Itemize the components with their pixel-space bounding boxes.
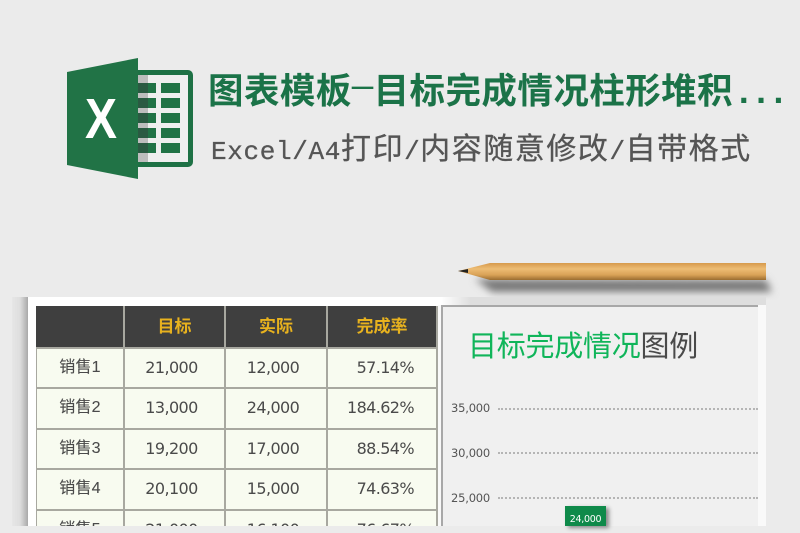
panel: chart	[441, 305, 758, 526]
axis label 30,000: 30,000	[451, 446, 490, 460]
bar: 24,000	[565, 506, 606, 526]
axis label 35,000: 35,000	[451, 401, 490, 415]
panel: data table: 实际	[259, 317, 293, 336]
panel: data table	[36, 306, 438, 526]
icon: Excel logo: X	[85, 87, 117, 151]
panel: data table: 15,000	[247, 479, 299, 498]
panel: data table: 19,200	[145, 439, 198, 458]
gridline 30,000	[498, 452, 758, 454]
row 4: 销售4	[59, 480, 101, 497]
panel: data table: 完成率	[356, 317, 408, 336]
panel: data table: 88.54%	[357, 439, 414, 458]
row 2	[37, 389, 123, 428]
panel: paper	[28, 297, 766, 526]
row 2: 销售2	[59, 399, 101, 416]
gridline 35,000	[498, 408, 758, 410]
row 1: 销售1	[59, 359, 101, 376]
row 1	[37, 349, 123, 387]
panel: data table: 21,000	[145, 358, 198, 377]
panel: data table: 74.63%	[357, 479, 414, 498]
table header	[36, 306, 123, 347]
title: 图表模板—目标完成情况柱形堆积...	[208, 67, 785, 114]
panel: data table: 24,000	[247, 398, 299, 417]
row 3	[37, 430, 123, 468]
subtitle: Excel/A4打印/内容随意修改/自带格式	[211, 135, 752, 169]
icon: Excel logo	[67, 58, 193, 179]
panel: data table: 12,000	[247, 358, 299, 377]
bar: 24,000: 24,000	[570, 514, 601, 525]
icon: pencil	[458, 263, 776, 298]
panel: data table: 目标	[158, 317, 192, 336]
row 4	[37, 470, 123, 509]
row 5	[37, 511, 123, 533]
panel: paper lower	[438, 305, 766, 526]
panel: data table: 57.14%	[357, 358, 414, 377]
chart title: 目标完成情况图例	[468, 331, 698, 363]
gridline 25,000	[498, 497, 758, 499]
panel: data table: 184.62%	[347, 398, 414, 417]
paper shadow	[12, 297, 28, 526]
panel: data table: 13,000	[145, 398, 198, 417]
row 3: 销售3	[59, 440, 101, 457]
panel: data table: 17,000	[247, 439, 299, 458]
axis label 25,000: 25,000	[451, 491, 490, 505]
panel: data table: 20,100	[145, 479, 198, 498]
